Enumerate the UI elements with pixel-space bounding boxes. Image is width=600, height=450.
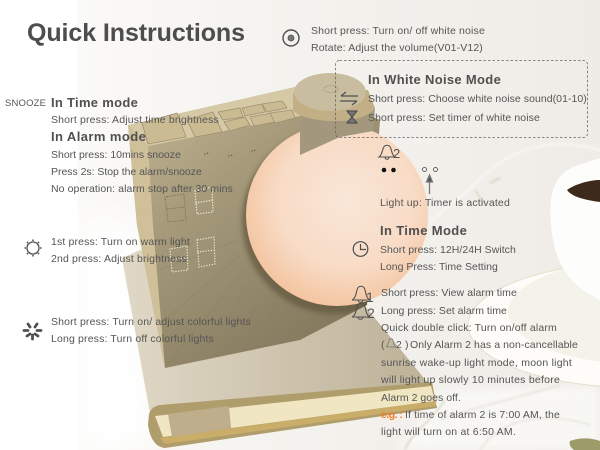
panel: white noise mode: In White Noise Mode (368, 72, 501, 87)
panel: snooze instructions: SNOOZE (5, 98, 46, 109)
panel: snooze instructions (5, 95, 233, 195)
wood grain rays (169, 266, 170, 267)
icon: colorful light (24, 324, 41, 339)
icon: alarm 1 bell (352, 286, 374, 305)
panel: alarm instructions: 2 (396, 339, 402, 351)
panel: time mode: Short press: 12H/24H Switch (380, 244, 516, 256)
LED clock digits (165, 150, 256, 272)
panel: alarm instructions: ) (405, 339, 409, 351)
text: warm light instructions: 1st press: Turn on warm light (51, 236, 190, 248)
title: Quick Instructions (27, 19, 245, 47)
panel: white noise mode: Short press: Choose white noise sound(01-10) (368, 93, 587, 105)
text: colorful light instructions (51, 316, 251, 345)
moon lamp (242, 124, 428, 314)
text: colorful light instructions: Long press: Turn off colorful lights (51, 333, 214, 345)
icon: volume knob (283, 30, 299, 46)
panel: alarm instructions: Alarm 2 goes off. (381, 392, 461, 404)
panel: snooze instructions: No operation: alarm stop after 30 mins (51, 183, 233, 195)
icon: clock (353, 242, 368, 256)
icon: hourglass (347, 111, 357, 123)
icon: alarm 2 bell (352, 303, 375, 321)
panel: time mode (353, 223, 516, 273)
text: knob instructions (311, 25, 485, 54)
icon: alarm 2 bell: 2 (393, 146, 400, 161)
text: warm light instructions: 2nd press: Adjust brightness (51, 253, 187, 265)
panel: alarm instructions: ( (381, 339, 385, 351)
panel: white noise mode: Short press: Set timer of white noise (368, 112, 540, 124)
panel: white noise mode (336, 60, 588, 138)
text: warm light instructions (51, 236, 190, 265)
panel: alarm instructions (352, 286, 578, 438)
panel: time mode: In Time Mode (380, 223, 467, 238)
panel: alarm instructions: Only Alarm 2 has a non-cancellable (410, 339, 578, 351)
icon: alarm 2 bell (379, 145, 400, 161)
photo: notebook (122, 250, 437, 448)
photo: green leaf (570, 438, 600, 450)
text: knob instructions: Short press: Turn on/ off white noise (311, 25, 485, 37)
panel: time mode: Long Press: Time Setting (380, 261, 498, 273)
timer indicator dots (382, 168, 438, 172)
photo: coffee cup and saucer (468, 158, 600, 388)
rotary knob (293, 73, 375, 155)
panel: alarm instructions: sunrise wake-up light mode, moon light (381, 357, 572, 369)
panel: snooze instructions: Short press: 10mins snooze (51, 149, 181, 161)
panel: alarm instructions: Long press: Set alarm time (381, 305, 507, 317)
panel: snooze instructions: In Time mode (51, 95, 138, 110)
text: knob instructions: Rotate: Adjust the volume(V01-V12) (311, 42, 483, 54)
icon: alarm 2 bell: 2 (367, 305, 375, 321)
icon: alarm 1 bell: 1 (366, 289, 374, 305)
photo: wooden clock (128, 73, 428, 368)
icon: warm light sun (24, 240, 42, 256)
panel: alarm instructions: Quick double click: Turn on/off alarm (381, 322, 557, 334)
panel: snooze instructions: Short press: Adjust time brightness (51, 114, 219, 126)
text: timer light note: Light up: Timer is activated (380, 197, 510, 209)
panel: alarm instructions: will light up slowly 10 minutes before (380, 374, 560, 386)
clock control buttons (142, 101, 295, 144)
text: colorful light instructions: Short press: Turn on/ adjust colorful lights (51, 316, 251, 328)
panel: alarm instructions: If time of alarm 2 is 7:00 AM, the (405, 409, 560, 421)
icon: switch arrows (340, 92, 358, 105)
panel: alarm instructions: light will turn on at 6:50 AM. (381, 426, 516, 438)
panel: alarm instructions: e.g. : (381, 409, 403, 421)
panel: alarm instructions: Short press: View alarm time (381, 287, 517, 299)
panel: snooze instructions: Press 2s: Stop the alarm/snooze (51, 166, 202, 178)
panel: snooze instructions: In Alarm mode (51, 129, 146, 144)
arrow: to timer dot (426, 175, 432, 194)
